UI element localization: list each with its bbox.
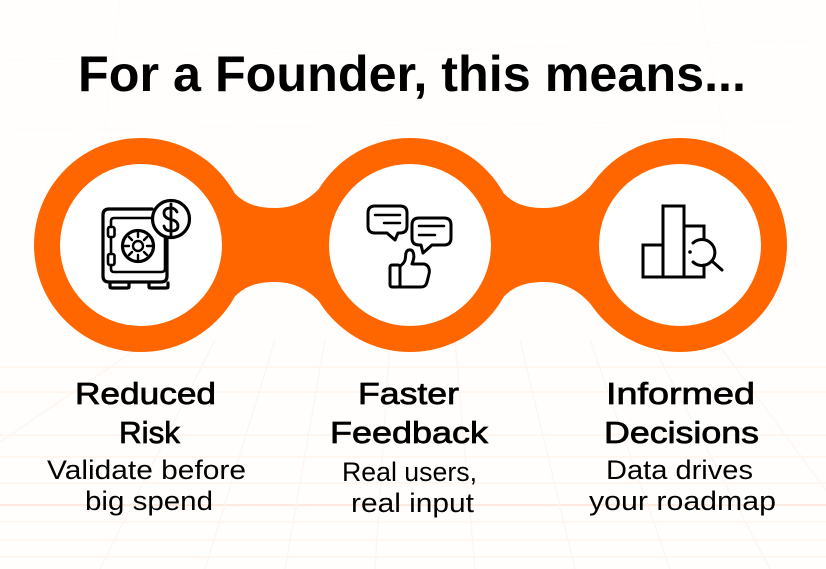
text: faster feedback: Real users, xyxy=(342,457,477,487)
icon: bar chart with magnifier xyxy=(643,206,722,277)
text: reduced risk: Validate before xyxy=(47,455,246,485)
text: faster feedback: Feedback xyxy=(330,415,489,450)
text: informed decisions: Data drives xyxy=(606,455,753,485)
icon: safe with dollar coin xyxy=(103,200,190,288)
text: reduced risk: Reduced xyxy=(75,376,216,411)
text: reduced risk: Risk xyxy=(119,415,180,450)
text: faster feedback: Faster xyxy=(358,376,459,411)
text: reduced risk: big spend xyxy=(85,486,213,516)
icon: speech bubbles and thumbs up xyxy=(368,206,451,287)
text: informed decisions: Informed xyxy=(606,376,755,411)
text: reduced risk xyxy=(47,376,246,516)
text: faster feedback xyxy=(330,376,489,518)
text: faster feedback: real input xyxy=(351,488,475,518)
text: informed decisions: Decisions xyxy=(604,415,759,450)
title: For a Founder, this means... xyxy=(78,46,746,102)
orange connected rings xyxy=(34,138,787,352)
text: informed decisions xyxy=(589,376,776,516)
text: informed decisions: your roadmap xyxy=(589,486,776,516)
